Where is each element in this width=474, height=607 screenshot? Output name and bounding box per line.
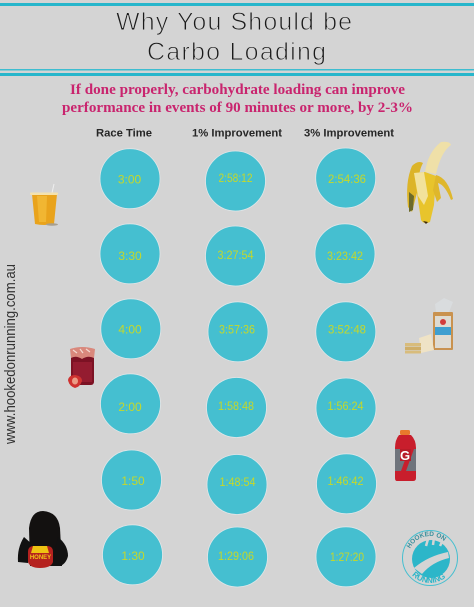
column headers: 3% Improvement xyxy=(304,128,394,140)
column headers xyxy=(96,128,394,140)
icon: jam jar with strawberry xyxy=(68,347,95,388)
column: 1% improvement: 1:48:54 xyxy=(220,475,256,489)
title xyxy=(116,8,352,66)
column: race time xyxy=(100,149,162,585)
subtitle: performance in events of 90 minutes or more, by 2-3% xyxy=(62,100,413,116)
title: Why You Should be xyxy=(116,8,352,36)
column: 3% improvement: 2:54:36 xyxy=(328,172,366,186)
logo: Hooked on Running: HOOKED ON xyxy=(406,532,446,548)
icon: sports drink bottle: G xyxy=(400,448,410,463)
column: 1% improvement: 1:58:48 xyxy=(218,399,254,413)
logo: Hooked on Running: RUNNING xyxy=(412,571,445,583)
icon: bear with honey pot xyxy=(18,511,68,568)
icon: bread loaf and slices xyxy=(405,298,453,354)
column: 3% improvement xyxy=(315,148,376,587)
column: race time: 1:50 xyxy=(121,474,145,488)
column: 3% improvement: 1:56:24 xyxy=(328,399,364,413)
column: 1% improvement: 3:57:36 xyxy=(219,322,255,336)
column: race time: 3:00 xyxy=(118,172,142,186)
column: race time: 3:30 xyxy=(118,249,142,263)
column: 1% improvement: 2:58:12 xyxy=(218,171,253,185)
column: 1% improvement: 1:29:06 xyxy=(218,549,254,563)
column: race time: 4:00 xyxy=(118,322,142,336)
icon: juice cup xyxy=(30,184,58,226)
title: Carbo Loading xyxy=(147,38,326,66)
website url: www.hookedonrunning.com.au xyxy=(2,264,19,445)
column: 3% improvement: 1:27:20 xyxy=(330,550,364,564)
column headers: Race Time xyxy=(96,128,152,140)
column: race time: 2:00 xyxy=(118,400,142,414)
subtitle: If done properly, carbohydrate loading can improve xyxy=(70,82,405,98)
column: 3% improvement: 3:52:48 xyxy=(328,322,366,336)
icon: banana xyxy=(407,142,453,224)
icon: sports drink bottle xyxy=(395,430,416,481)
subtitle xyxy=(62,82,413,116)
column: race time: 1:30 xyxy=(121,549,145,563)
column: 1% improvement xyxy=(206,151,268,587)
column: 3% improvement: 1:46:42 xyxy=(328,474,364,488)
logo: Hooked on Running xyxy=(402,530,458,586)
column: 1% improvement: 3:27:54 xyxy=(218,248,254,262)
column headers: 1% Improvement xyxy=(192,128,282,140)
icon: bear with honey pot: HONEY xyxy=(30,555,51,561)
column: 3% improvement: 3:23:42 xyxy=(327,249,363,263)
